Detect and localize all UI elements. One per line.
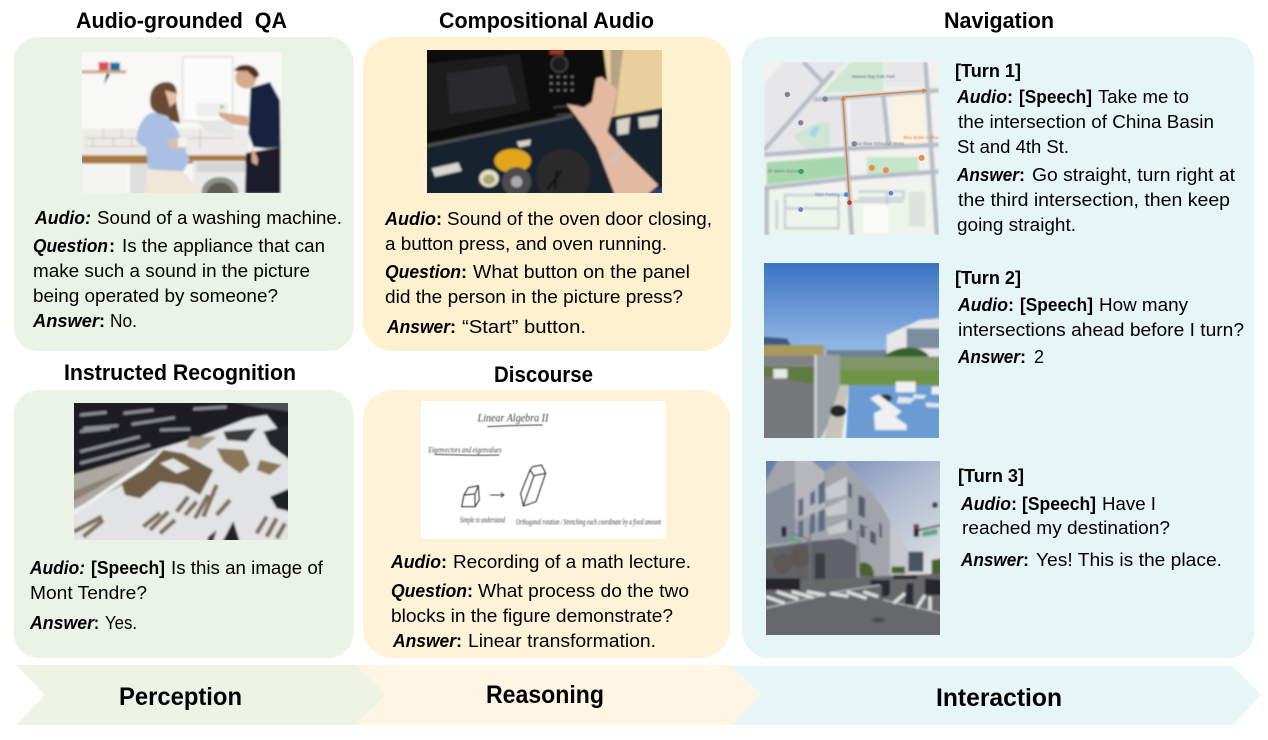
image: handwritten linear algebra notes with blocks: Linear Algebra II [477,413,549,425]
text block: audio, question and answer: Linear transformation. [468,631,656,651]
title: Instructed Recognition: Instructed Recognition [64,360,296,385]
panel: Compositional Audio [363,37,731,351]
text block: turn 2: [Speech] [1020,295,1093,315]
text block: turn 2: [Turn 2] [955,268,1021,288]
arrow band: Reasoning: Reasoning [486,681,604,709]
image: street map with route [764,62,939,235]
text block: audio, question and answer: Answer [32,311,100,331]
text block: turn 2: How many [1099,295,1188,315]
text block: audio, question and answer: What button on the panel [473,262,690,282]
arrow band: Perception [16,665,386,725]
text block: audio, question and answer: Sound of the oven door closing, [447,209,712,229]
text block: audio, question and answer: Answer [386,317,451,337]
text block: audio, question and answer: being operated by someone? [33,286,278,306]
text block: turn 3: : [1023,550,1029,570]
text block: turn 2: : [1008,295,1014,315]
image: hand pressing oven button [427,50,662,193]
text block: turn 3: [Speech] [1022,494,1096,514]
text block: audio, question and answer: Audio [390,552,441,572]
text block: audio, question and answer: Recording of a math lecture. [453,552,691,572]
text block: turn 2: Audio [957,295,1008,315]
text block: audio and answer [29,558,324,633]
text block: turn 3: [Turn 3] [958,466,1024,486]
text block: audio, question and answer: : [461,262,467,282]
text block: audio, question and answer: a button press, and oven running. [385,234,667,254]
text block: audio, question and answer: Audio: [34,208,91,228]
text block: audio, question and answer: What process do the two [478,581,689,601]
text block: audio, question and answer [32,208,342,331]
text block: audio and answer: : [94,613,99,633]
title: Discourse: Discourse [494,362,593,387]
text block: audio and answer: Yes. [105,613,137,633]
text block: turn 1: the intersection of China Basin [958,112,1214,132]
arrow band: Reasoning [355,665,761,725]
image: street map with route: SF-Marin Soccer [767,169,800,174]
text block: turn 1: St and 4th St. [957,137,1069,157]
text block: audio, question and answer [384,209,712,337]
text block: turn 3: Have I [1102,494,1156,514]
text block: audio, question and answer: Question [385,262,461,282]
text block: turn 1: [Turn 1] [955,61,1021,81]
image: handwritten linear algebra notes with blocks [421,401,666,539]
image: handwritten linear algebra notes with blocks: Eigenvectors and eigenvalues [428,444,502,454]
panel: Navigation [742,37,1254,658]
text block: audio, question and answer: : [109,236,115,256]
text block: turn 1: : [1007,87,1013,107]
arrow band: Interaction [731,666,1261,725]
text block: turn 1: [Speech] [1019,87,1092,107]
text block: audio, question and answer: : [99,311,105,331]
text block: turn 1: Take me to [1098,87,1189,107]
text block: audio, question and answer: Question [391,581,467,601]
text block: audio and answer: Audio: [29,558,85,578]
text block: audio and answer: [Speech] [91,558,165,578]
text block: turn 2: 2 [1034,347,1044,367]
text block: audio, question and answer: Sound of a washing machine. [97,208,342,228]
image: street map with route: R&S Parking Lot [815,192,848,197]
text block: turn 1: going straight. [957,215,1076,235]
arrow band: Perception: Perception [119,683,242,711]
text block: audio and answer: Is this an image of [171,558,324,578]
text block: audio and answer: Mont Tendre? [30,583,147,603]
text block: audio, question and answer: : [450,317,456,337]
image: snowy mountain aerial view [74,403,288,540]
text block: turn 1: Audio [956,87,1007,107]
text block: audio, question and answer: blocks in the figure demonstrate? [391,606,673,626]
text block: audio, question and answer: Answer [392,631,457,651]
text block: audio, question and answer: make such a sound in the picture [33,261,310,281]
text block: turn 3: Yes! This is the place. [1036,550,1222,570]
panel: Audio-grounded QA [14,37,354,351]
text block: audio, question and answer: : [436,209,442,229]
text block: audio and answer: Answer [29,613,95,633]
panel: Discourse [363,390,730,658]
title: Navigation: Navigation [944,8,1054,33]
image: couple in a kitchen with boiler and washing machine [82,52,282,193]
text block: audio, question and answer: : [467,581,473,601]
text block: audio, question and answer: : [456,631,462,651]
image: handwritten linear algebra notes with blocks: Simple to understand [460,515,506,524]
text block: turn 1: the third intersection, then keep [958,190,1230,210]
text block: turn 2 [955,268,1244,367]
text block: turn 3: reached my destination? [962,518,1170,538]
text block: turn 3: Audio [960,494,1011,514]
text block: audio, question and answer [390,552,691,651]
image: street map with route: Blue Bear School of Music [854,141,905,146]
title: Compositional Audio: Compositional Audio [439,8,654,33]
text block: turn 1: : [1019,165,1025,185]
text block: audio, question and answer: No. [110,311,137,331]
route line [843,90,926,203]
text block: audio, question and answer: “Start” button. [462,317,586,337]
text block: turn 2: Answer [957,347,1021,367]
text block: audio, question and answer: Is the appliance that can [122,236,325,256]
image: street map with route: Blue Bottle Coffee [904,135,939,140]
image: street corner with apartment building [766,461,940,635]
text block: turn 2: intersections ahead before I turn? [958,320,1244,340]
text block: turn 2: : [1020,347,1026,367]
text block: audio, question and answer: : [441,552,447,572]
text block: turn 3 [958,466,1222,570]
text block: audio, question and answer: Audio [384,209,436,229]
text block: turn 1: Go straight, turn right at [1032,165,1235,185]
text block: audio, question and answer: Question [33,236,108,256]
panel: Instructed Recognition [14,390,354,658]
arrow band: Interaction: Interaction [936,684,1062,712]
text block: turn 1: Answer [956,165,1020,185]
text block: turn 3: : [1011,494,1017,514]
text block: audio, question and answer: did the person in the picture press? [385,287,683,307]
text block: turn 1 [955,61,1235,235]
title: Audio-grounded QA: Audio-grounded QA [76,8,287,33]
text block: turn 3: Answer [960,550,1024,570]
image: street view of fenced field and plaza [764,263,939,438]
image: street map with route: Mission Bay Kids Park [852,74,896,79]
